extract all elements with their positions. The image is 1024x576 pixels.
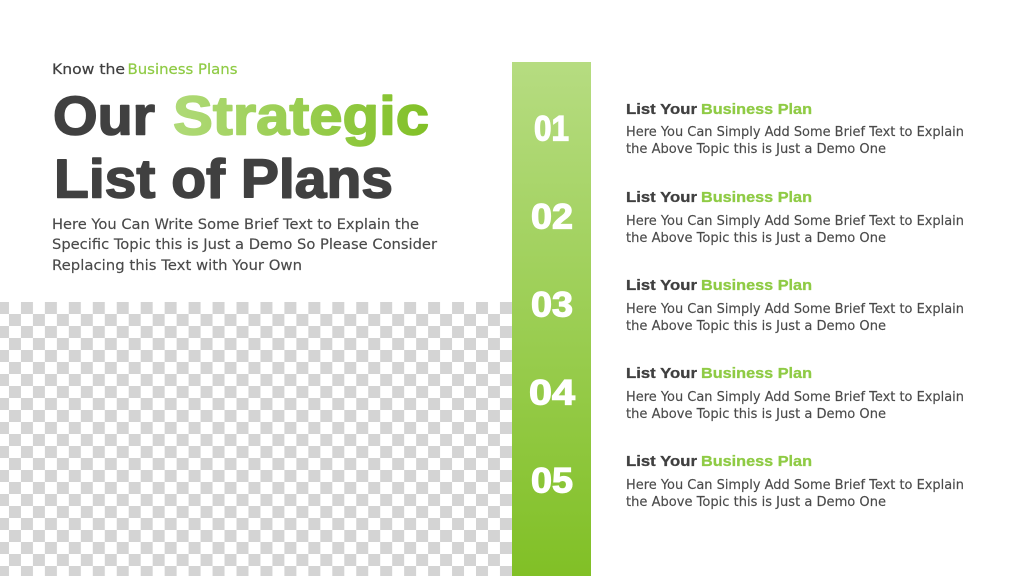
plan item 3: the Above Topic this is Just a Demo One xyxy=(626,319,886,334)
number 03: 03 xyxy=(531,286,573,324)
eyebrow heading: Know the xyxy=(52,62,125,78)
plan item 5: the Above Topic this is Just a Demo One xyxy=(626,495,886,510)
number 04: 04 xyxy=(529,374,576,412)
plan item 2: List Your xyxy=(626,189,697,206)
intro paragraph: Replacing this Text with Your Own xyxy=(52,258,302,274)
plan item 1: Business Plan xyxy=(701,101,812,118)
main title: List of Plans xyxy=(54,148,393,210)
intro paragraph: Specific Topic this is Just a Demo So Please Consider xyxy=(52,237,437,253)
plan item 3: Here You Can Simply Add Some Brief Text to Explain xyxy=(626,302,964,317)
plan item 4: Business Plan xyxy=(701,365,812,382)
plan item 2: Here You Can Simply Add Some Brief Text to Explain xyxy=(626,214,964,229)
plan item 2 xyxy=(626,189,964,246)
plan item 5: Business Plan xyxy=(701,453,812,470)
plan item 4: List Your xyxy=(626,365,697,382)
plan item 2: the Above Topic this is Just a Demo One xyxy=(626,231,886,246)
plan item 3: Business Plan xyxy=(701,277,812,294)
plan item 5: Here You Can Simply Add Some Brief Text to Explain xyxy=(626,478,964,493)
plan item 4: Here You Can Simply Add Some Brief Text to Explain xyxy=(626,390,964,405)
intro paragraph: Here You Can Write Some Brief Text to Explain the xyxy=(52,217,419,233)
number 05: 05 xyxy=(531,462,573,500)
plan item 1: Here You Can Simply Add Some Brief Text to Explain xyxy=(626,125,964,140)
plan item 2: Business Plan xyxy=(701,189,812,206)
plan item 4 xyxy=(626,365,964,422)
main title: Our xyxy=(53,84,155,146)
plan item 3: List Your xyxy=(626,277,697,294)
number 01: 01 xyxy=(534,110,569,148)
plan item 5: List Your xyxy=(626,453,697,470)
plan item 1: List Your xyxy=(626,101,697,118)
number 02: 02 xyxy=(531,198,573,236)
plan item 5 xyxy=(626,453,964,510)
intro paragraph xyxy=(52,217,437,274)
plan item 1: the Above Topic this is Just a Demo One xyxy=(626,142,886,157)
plan item 1 xyxy=(626,101,964,157)
transparent image placeholder checkerboard xyxy=(0,302,512,576)
plan item 4: the Above Topic this is Just a Demo One xyxy=(626,407,886,422)
main title xyxy=(53,84,429,210)
plan item 3 xyxy=(626,277,964,334)
eyebrow heading: Business Plans xyxy=(128,62,238,78)
green number column xyxy=(512,62,591,576)
eyebrow heading xyxy=(52,62,238,78)
main title: Strategic xyxy=(173,84,429,146)
